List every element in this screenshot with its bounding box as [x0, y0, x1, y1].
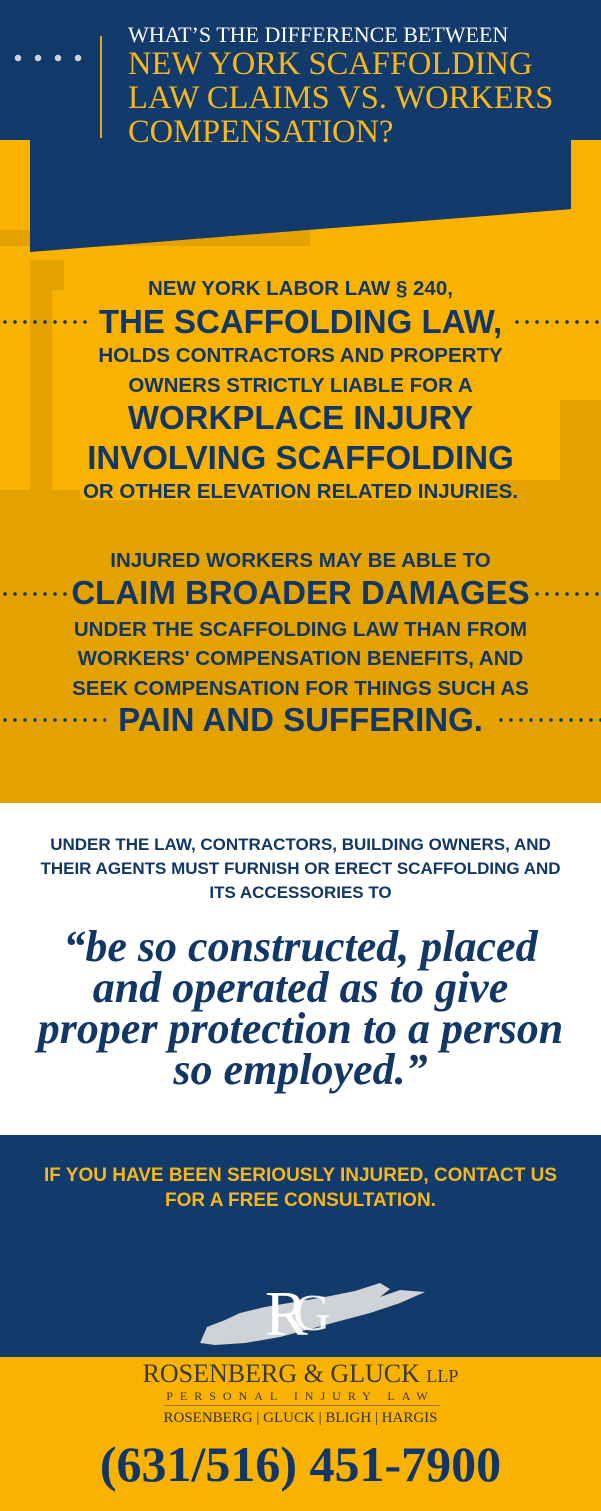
law description: THEIR AGENTS MUST FURNISH OR ERECT SCAFFOLDING AND	[40, 859, 561, 878]
text block 2: INJURED WORKERS MAY BE ABLE TO	[110, 549, 491, 572]
text block 2: SEEK COMPENSATION FOR THINGS SUCH AS	[72, 677, 529, 700]
yellow hero section	[0, 140, 601, 803]
title text	[128, 28, 552, 142]
logo: G	[293, 1285, 331, 1342]
text block 1: THE SCAFFOLDING LAW,	[99, 303, 502, 340]
quote	[34, 922, 563, 1094]
logo	[200, 1278, 425, 1349]
title text: NEW YORK SCAFFOLDING	[128, 46, 532, 82]
title dots	[8, 54, 82, 62]
text block 1: INVOLVING SCAFFOLDING	[87, 439, 514, 476]
title panel	[30, 28, 571, 252]
title text: COMPENSATION?	[128, 114, 393, 150]
law description	[40, 835, 561, 902]
text block 1: WORKPLACE INJURY	[128, 399, 473, 436]
quote: “be so constructed, placed	[63, 922, 538, 971]
subtitle: PERSONAL INJURY LAW	[166, 1389, 435, 1403]
logo: R	[265, 1278, 308, 1349]
partners: ROSENBERG | GLUCK | BLIGH | HARGIS	[163, 1410, 438, 1426]
text block 1: NEW YORK LABOR LAW § 240,	[148, 277, 453, 300]
contact text: IF YOU HAVE BEEN SERIOUSLY INJURED, CONTACT US	[44, 1165, 557, 1186]
phone: (631/516) 451-7900	[100, 1436, 501, 1492]
text block 1: OWNERS STRICTLY LIABLE FOR A	[128, 374, 473, 397]
top navy band	[0, 0, 601, 140]
footer yellow	[0, 1357, 601, 1511]
background buildings and crane	[0, 228, 601, 803]
contact panel	[0, 1135, 601, 1357]
text block 1	[3, 277, 599, 503]
quote: so employed.”	[173, 1045, 428, 1094]
text block 2: PAIN AND SUFFERING.	[118, 701, 483, 738]
quote: proper protection to a person	[38, 1004, 563, 1053]
text block 2: CLAIM BROADER DAMAGES	[71, 574, 530, 611]
firm name: ROSENBERG & GLUCK LLP	[143, 1359, 458, 1388]
text block 2: UNDER THE SCAFFOLDING LAW THAN FROM	[74, 618, 527, 641]
gold divider	[100, 36, 102, 138]
title text: WHAT’S THE DIFFERENCE BETWEEN	[128, 22, 508, 47]
contact text: FOR A FREE CONSULTATION.	[165, 1190, 436, 1211]
text block 1: OR OTHER ELEVATION RELATED INJURIES.	[83, 480, 518, 503]
contact text	[44, 1165, 557, 1211]
quote: and operated as to give	[93, 963, 508, 1012]
text block 2: WORKERS' COMPENSATION BENEFITS, AND	[78, 647, 523, 670]
title text: LAW CLAIMS VS. WORKERS	[128, 80, 553, 116]
text block 1: HOLDS CONTRACTORS AND PROPERTY	[98, 344, 503, 367]
text block 2	[3, 549, 601, 738]
law description: ITS ACCESSORIES TO	[209, 883, 392, 902]
law description: UNDER THE LAW, CONTRACTORS, BUILDING OWNERS, AND	[50, 835, 551, 854]
